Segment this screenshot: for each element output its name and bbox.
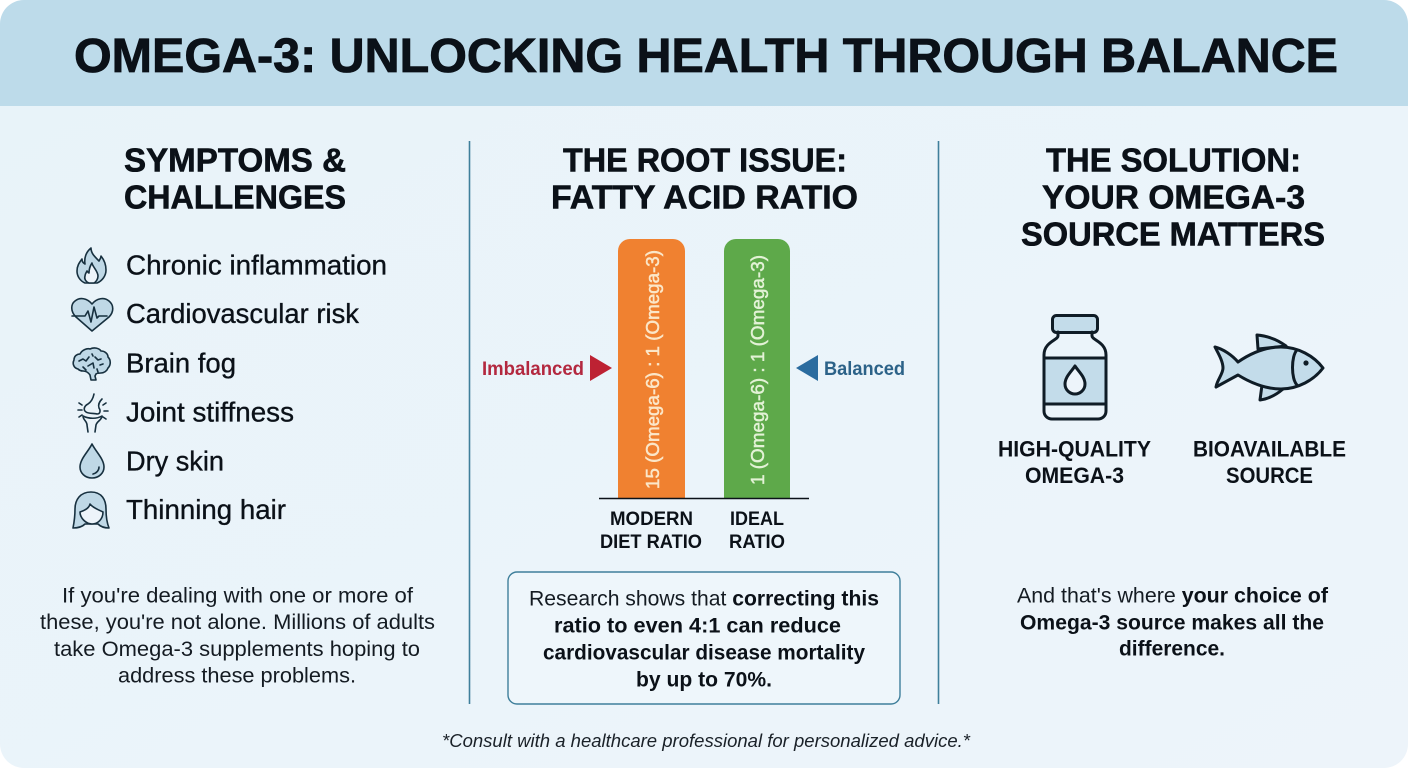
label: ideal ratio: IDEAL bbox=[730, 509, 784, 530]
callout: imbalanced arrow bbox=[482, 355, 612, 381]
icon: flame bbox=[77, 248, 106, 283]
callout: research finding bbox=[508, 572, 900, 704]
label: modern diet ratio: DIET RATIO bbox=[600, 532, 702, 553]
icon: supplement bottle bbox=[1044, 316, 1106, 419]
text block: symptoms note: If you're dealing with one or more of bbox=[62, 584, 413, 608]
icon: joint bbox=[78, 394, 108, 432]
text block: symptoms note bbox=[40, 584, 435, 688]
text block: solution note: And that's where your choice of bbox=[1017, 584, 1329, 608]
bar: ideal: 1 (Omega-6) : 1 (Omega-3) bbox=[747, 255, 768, 485]
title: OMEGA-3: UNLOCKING HEALTH THROUGH BALANCE bbox=[74, 30, 1338, 83]
label: bioavailable source bbox=[1193, 436, 1346, 488]
footer disclaimer: *Consult with a healthcare professional for personalized advice.* bbox=[442, 731, 971, 751]
label: bioavailable source: SOURCE bbox=[1226, 463, 1313, 488]
heading: symptoms bbox=[124, 142, 346, 216]
heading: root issue bbox=[551, 142, 858, 216]
item: thinning hair: Thinning hair bbox=[126, 494, 286, 525]
label: ideal ratio bbox=[729, 509, 785, 553]
text block: symptoms note: take Omega-3 supplements hoping to bbox=[54, 638, 420, 661]
callout: research finding: Research shows that correcting this bbox=[529, 588, 879, 610]
panel: root issue bbox=[482, 142, 905, 704]
label: modern diet ratio: MODERN bbox=[610, 509, 693, 530]
panel: symptoms and challenges bbox=[40, 142, 435, 688]
item: cardiovascular risk: Cardiovascular risk bbox=[126, 298, 360, 329]
item: chronic inflammation: Chronic inflammation bbox=[126, 250, 387, 280]
label: bioavailable source: BIOAVAILABLE bbox=[1193, 436, 1346, 462]
label: ideal ratio: RATIO bbox=[729, 532, 785, 553]
heading: root issue: THE ROOT ISSUE: bbox=[563, 142, 847, 178]
axis bbox=[599, 498, 809, 500]
text block: solution note: difference. bbox=[1119, 638, 1225, 660]
bar: modern diet: 15 (Omega-6) : 1 (Omega-3) bbox=[642, 250, 663, 489]
label: modern diet ratio bbox=[600, 509, 702, 553]
heading: solution: THE SOLUTION: bbox=[1046, 142, 1301, 178]
panel: solution bbox=[998, 142, 1346, 660]
item: dry skin: Dry skin bbox=[126, 446, 224, 476]
item: joint stiffness: Joint stiffness bbox=[126, 396, 294, 428]
heading: symptoms: SYMPTOMS & bbox=[124, 142, 346, 178]
bar: modern diet bbox=[618, 239, 685, 499]
callout: balanced arrow bbox=[796, 355, 905, 381]
heading: symptoms: CHALLENGES bbox=[124, 178, 346, 216]
label: high-quality omega-3: OMEGA-3 bbox=[1025, 463, 1124, 488]
icon: hair bbox=[73, 492, 109, 528]
label: high-quality omega-3 bbox=[998, 436, 1151, 488]
heading: solution: YOUR OMEGA-3 bbox=[1042, 178, 1305, 216]
heading: solution: SOURCE MATTERS bbox=[1021, 216, 1325, 252]
heading: root issue: FATTY ACID RATIO bbox=[551, 178, 858, 216]
callout: balanced arrow: Balanced bbox=[824, 359, 905, 380]
item: brain fog: Brain fog bbox=[126, 348, 236, 378]
text block: symptoms note: these, you're not alone. Millions of adults bbox=[40, 611, 435, 634]
icon: water drop bbox=[80, 444, 104, 478]
bar chart bbox=[482, 239, 905, 553]
icon: heart with pulse bbox=[72, 299, 113, 331]
icon: fish bbox=[1215, 335, 1323, 400]
label: high-quality omega-3: HIGH-QUALITY bbox=[998, 436, 1151, 462]
callout: research finding: by up to 70%. bbox=[636, 668, 772, 692]
heading: solution bbox=[1021, 142, 1325, 252]
callout: research finding: ratio to even 4:1 can reduce bbox=[554, 614, 841, 638]
callout: imbalanced arrow: Imbalanced bbox=[482, 359, 584, 380]
icon: brain bbox=[73, 348, 110, 380]
bar: ideal bbox=[724, 239, 790, 499]
text block: symptoms note: address these problems. bbox=[118, 664, 356, 688]
header band bbox=[0, 0, 1408, 106]
callout: research finding: cardiovascular disease mortality bbox=[543, 642, 865, 664]
text block: solution note bbox=[1017, 584, 1329, 660]
text block: solution note: Omega-3 source makes all the bbox=[1020, 612, 1324, 634]
